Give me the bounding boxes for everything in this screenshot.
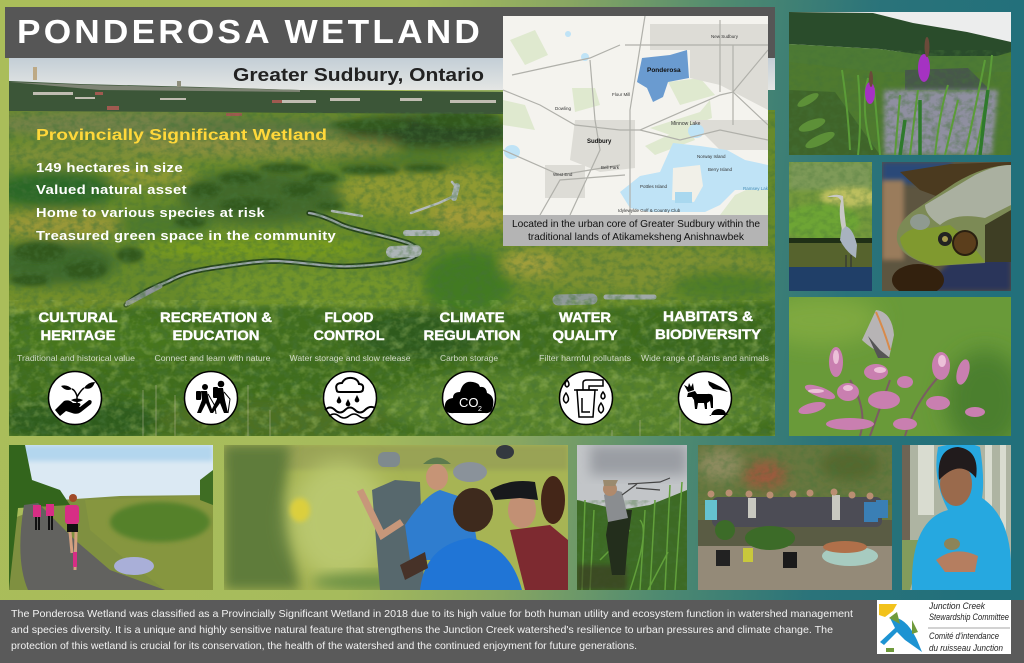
- panel: description footer: The Ponderosa Wetland was classified as a Provincially Significant Wetland in 2018 due to its high value for both human utility and ecosystem function in watershed management: [11, 609, 853, 620]
- service headings: REGULATION: [424, 328, 520, 343]
- icon: CO2 cloud: 2: [478, 406, 482, 413]
- panel: location map: West End: [553, 172, 573, 177]
- service headings: [38, 309, 761, 343]
- icon: water filter and drops: [560, 372, 612, 424]
- panel: location map: [503, 16, 771, 246]
- service headings: CULTURAL: [38, 310, 117, 325]
- photo: bullfrog: [882, 162, 1011, 296]
- panel: location map: Dowling: [555, 106, 572, 111]
- service descriptions: Wide range of plants and animals: [641, 353, 769, 363]
- service descriptions: Filter harmful pollutants: [539, 353, 631, 363]
- panel: location map: Ponderosa: [647, 67, 681, 74]
- service headings: HERITAGE: [40, 328, 116, 343]
- service descriptions: Connect and learn with nature: [154, 353, 271, 363]
- title bar: [5, 7, 775, 58]
- panel: location map: Idylewylde Golf & Country Club: [618, 208, 681, 213]
- photo: butterfly on pink flowers: [789, 297, 1011, 436]
- icon: hand and seedling: [48, 372, 102, 424]
- icon: moose, eagle and turtle: [678, 372, 732, 424]
- map caption: Located in the urban core of Greater Sudbury within the: [512, 219, 760, 230]
- bush clusters: [10, 112, 500, 286]
- panel: description footer: and species diversity. It is a unique and highly sensitive natural feature that strengthens the Junction Creek watershed's resilience to urban pressures and climate change. The: [11, 625, 833, 636]
- service descriptions: Traditional and historical value: [17, 353, 135, 363]
- service descriptions: [17, 353, 769, 363]
- map caption: traditional lands of Atikameksheng Anishnawbek: [528, 232, 745, 243]
- panel: location map: Pottles Island: [640, 184, 668, 189]
- service headings: BIODIVERSITY: [655, 327, 761, 342]
- key facts list: [36, 160, 337, 243]
- panel: description footer: [0, 600, 1024, 663]
- icon: rain cloud and flood waves: [324, 372, 376, 424]
- key facts list: 149 hectares in size: [36, 160, 183, 175]
- service headings: WATER: [559, 310, 611, 325]
- title bar: PONDEROSA WETLAND: [17, 13, 483, 50]
- icon: CO2 cloud: CO: [459, 395, 478, 410]
- key facts list: Treasured green space in the community: [36, 228, 337, 243]
- panel: location map: Bell Park: [601, 165, 620, 170]
- heading: Provincially Significant Wetland: Provincially Significant Wetland: [36, 127, 327, 144]
- logo: Junction Creek Stewardship Committee: du ruisseau Junction: [929, 643, 1003, 654]
- panel: location map: Flour Mill: [612, 92, 630, 97]
- foreground forest: [9, 302, 775, 436]
- photo: great blue heron: [789, 162, 872, 291]
- photo: runners on the trail: [9, 445, 213, 590]
- service headings: CONTROL: [314, 328, 384, 343]
- photo: volunteers with plants: [698, 445, 892, 590]
- service descriptions: Carbon storage: [440, 353, 498, 363]
- panel: location map: Norway Island: [697, 154, 726, 159]
- panel: location map: New Sudbury: [711, 34, 739, 39]
- photo: group field trip with guide: [224, 445, 568, 591]
- map caption: [503, 215, 768, 246]
- service headings: FLOOD: [324, 310, 374, 325]
- service headings: CLIMATE: [440, 310, 504, 325]
- river: [126, 182, 654, 305]
- photo: researcher with antenna in reeds: [577, 445, 687, 590]
- panel: location map: Sudbury: [587, 139, 612, 145]
- logo: Junction Creek Stewardship Committee: [877, 600, 1011, 654]
- icon: CO2 cloud: [442, 372, 496, 424]
- service headings: QUALITY: [552, 328, 618, 343]
- service headings: HABITATS &: [663, 309, 753, 324]
- panel: aerial wetland photo: [0, 58, 780, 442]
- panel: location map: Berry Island: [708, 167, 733, 172]
- service headings: EDUCATION: [172, 328, 260, 343]
- icon: two hikers: [184, 372, 238, 424]
- panel: location map: Ramsey Lake: [743, 186, 771, 191]
- photo: child holding a frog: [902, 444, 1011, 590]
- key facts list: Home to various species at risk: [36, 205, 266, 220]
- subtitle: location: Greater Sudbury, Ontario: [233, 65, 484, 85]
- photo: purple loosestrife by the water: [789, 12, 1011, 155]
- logo: Junction Creek Stewardship Committee: Junction Creek: [928, 601, 986, 612]
- panel: description footer: protection of this wetland is crucial for its conservation, the health of the watershed and the continued enjoyment for future generations.: [11, 641, 637, 652]
- panel: location map: Minnow Lake: [671, 121, 701, 127]
- logo: Junction Creek Stewardship Committee: Comité d'intendance: [929, 631, 999, 642]
- key facts list: Valued natural asset: [36, 182, 187, 197]
- service headings: RECREATION &: [160, 310, 272, 325]
- town on the horizon: [9, 67, 510, 116]
- service descriptions: Water storage and slow release: [290, 353, 411, 363]
